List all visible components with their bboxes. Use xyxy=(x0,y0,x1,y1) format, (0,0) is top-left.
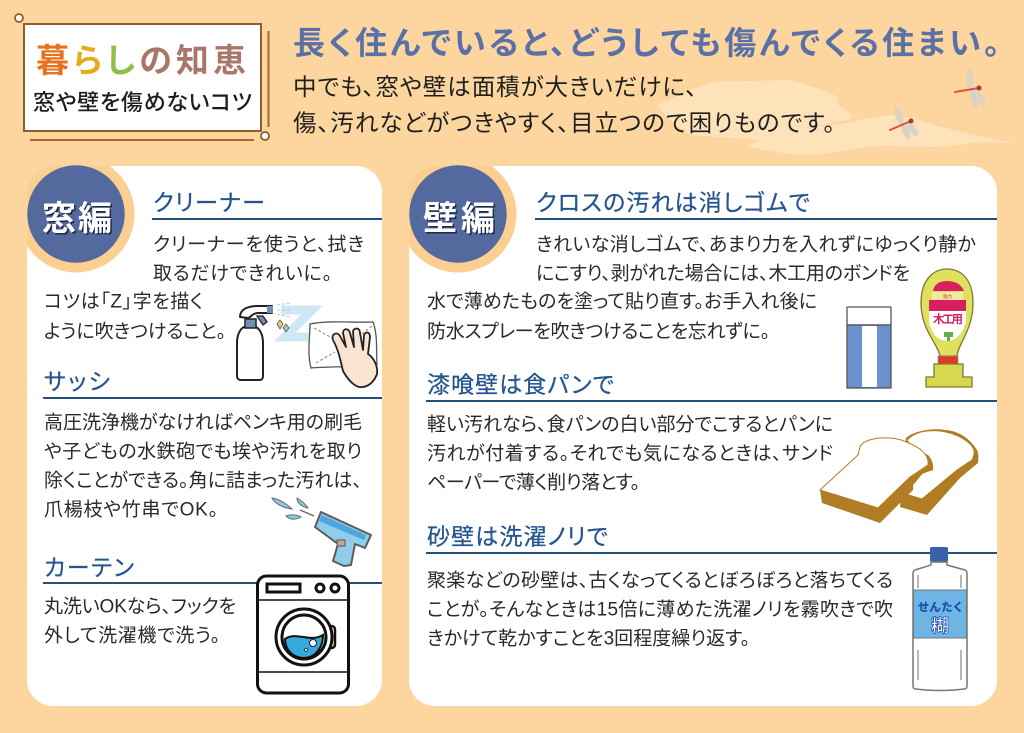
text: curtain: 丸洗いOKなら、フックを xyxy=(44,595,236,617)
text: sash xyxy=(44,411,362,520)
section: sash xyxy=(43,368,382,566)
heading: cleaner: クリーナー xyxy=(153,189,265,215)
text: sand wall: ことが。そんなときは15倍に薄めた洗濯ノリを霧吹きで吹 xyxy=(427,598,893,620)
text: plaster: 軽い汚れなら、食パンの白い部分でこするとパンに xyxy=(427,413,833,435)
text: cleaner: 取るだけできれいに。 xyxy=(153,263,332,284)
text: cloth wallpaper: 防水スプレーを吹きつけることを忘れずに。 xyxy=(427,320,770,342)
icon: laundry starch bottle: せんたく xyxy=(918,601,962,614)
section: cleaner xyxy=(44,189,382,387)
icon: laundry starch bottle: 糊 xyxy=(931,616,949,636)
icon: eraser xyxy=(847,307,891,388)
background clouds xyxy=(657,80,1015,155)
text: cloth wallpaper: きれいな消しゴムで、あまり力を入れずにゆっくり静か xyxy=(536,233,976,255)
text: cleaner: ように吹きつけること。 xyxy=(44,320,226,342)
text: cloth wallpaper: 水で薄めたものを塗って貼り直す。お手入れ後に xyxy=(427,290,817,312)
text: cleaner: クリーナーを使うと、拭き xyxy=(153,233,364,255)
badge: windows xyxy=(27,165,134,272)
plate heading: 暮らしの知恵 xyxy=(36,42,246,79)
intro text: 中でも、窓や壁は面積が大きいだけに、 xyxy=(293,74,697,100)
icon: dragonfly lower xyxy=(890,105,920,141)
heading: curtain: カーテン xyxy=(44,554,134,580)
badge: windows: 窓編 xyxy=(44,202,114,240)
icon: wood glue bottle xyxy=(921,269,973,387)
section: curtain xyxy=(43,554,382,693)
text: sash: 爪楊枝や竹串でOK。 xyxy=(44,498,218,520)
text: cleaner xyxy=(44,233,364,342)
section: sand wall xyxy=(426,523,997,690)
badge: walls: 壁編 xyxy=(423,200,495,238)
icon: dragonfly upper xyxy=(955,69,988,107)
panel: walls xyxy=(400,156,997,706)
heading: plaster: 漆喰壁は食パンで xyxy=(427,371,614,397)
text: sand wall: きかけて乾かすことを3回程度繰り返す。 xyxy=(427,627,750,649)
icon: water pistol xyxy=(272,498,371,566)
section: cloth wallpaper xyxy=(427,189,997,388)
section: plaster xyxy=(426,371,997,523)
badge: windows: 窓編 xyxy=(42,200,112,238)
icon: bread slices xyxy=(820,429,978,523)
text: cloth wallpaper: にこすり、剥がれた場合には、木工用のボンドを xyxy=(536,262,910,284)
intro text xyxy=(293,74,835,136)
text: curtain xyxy=(44,595,236,646)
text: sand wall: 聚楽などの砂壁は、古くなってくるとぼろぼろと落ちてくる xyxy=(427,569,893,591)
text: curtain: 外して洗濯機で洗う。 xyxy=(44,624,220,646)
heading: cloth wallpaper: クロスの汚れは消しゴムで xyxy=(536,189,810,215)
intro text: 傷、汚れなどがつきやすく、目立つので困りものです。 xyxy=(293,110,835,136)
icon: laundry starch bottle xyxy=(913,547,967,690)
text: plaster: ペーパーで薄く削り落とす。 xyxy=(427,471,640,493)
main headline: 長く住んでいると、どうしても傷んでくる住まい。 xyxy=(293,25,1000,61)
title plate xyxy=(15,14,269,140)
text: sand wall xyxy=(427,569,893,649)
text: cleaner: コツは「Z」字を描く xyxy=(44,290,203,312)
badge: walls xyxy=(409,165,516,272)
icon: wood glue bottle: 強力 xyxy=(943,293,952,300)
heading: sand wall: 砂壁は洗濯ノリで xyxy=(427,523,608,549)
text: plaster: 汚れが付着する。それでも気になるときは、サンド xyxy=(427,442,833,464)
heading: sash: サッシ xyxy=(44,368,110,394)
text: sash: や子どもの水鉄砲でも埃や汚れを取り xyxy=(44,440,362,462)
text: sash: 高圧洗浄機がなければペンキ用の刷毛 xyxy=(44,411,362,433)
icon: washing machine xyxy=(258,576,348,693)
icon: spray bottle, cloth and hand xyxy=(237,303,377,387)
text: plaster xyxy=(427,413,833,493)
badge: walls: 壁編 xyxy=(424,202,496,240)
text: sash: 除くことができる。角に詰まった汚れは、 xyxy=(44,469,362,491)
panel: windows xyxy=(18,156,382,706)
icon: wood glue bottle: 木工用 xyxy=(933,312,963,326)
plate subheading: 窓や壁を傷めないコツ xyxy=(33,90,252,115)
text: cloth wallpaper xyxy=(427,233,976,342)
